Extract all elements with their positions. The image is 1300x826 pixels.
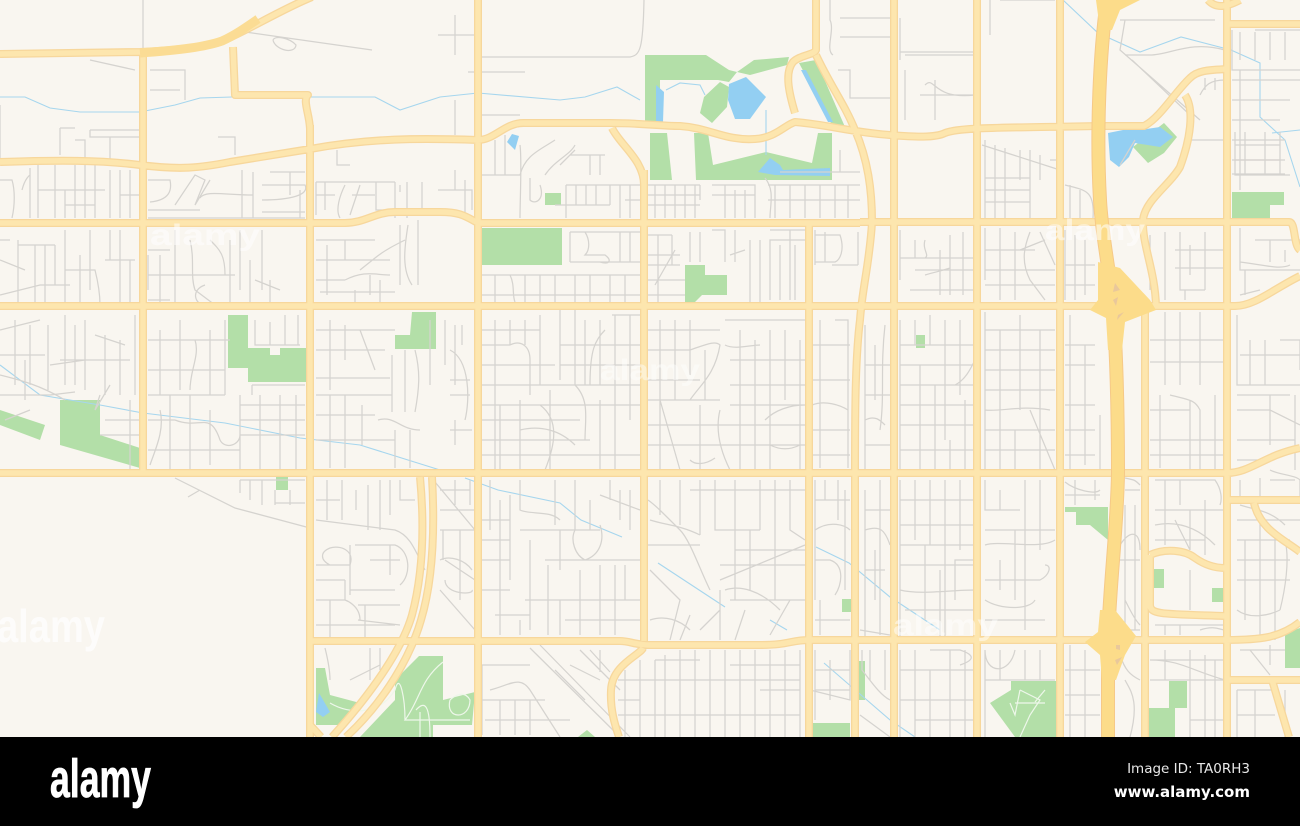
streets: north strip <box>0 50 1225 165</box>
park: central small <box>685 265 727 302</box>
freeway top fork <box>1096 0 1140 30</box>
streets: north edge <box>90 0 1300 190</box>
interchange: north <box>1090 262 1156 350</box>
lake: east <box>1108 127 1173 167</box>
lake: small <box>507 134 519 150</box>
streets: row C <box>0 315 140 470</box>
park: south golf <box>316 668 360 725</box>
watermark: centre: alamy <box>600 354 700 387</box>
park: north central rectangle <box>482 228 562 265</box>
lakes <box>316 70 1173 717</box>
streets: row D <box>175 478 310 528</box>
streets: row B <box>0 230 135 305</box>
park: west blocks <box>228 315 306 382</box>
interchange: south <box>1085 610 1136 680</box>
watermark: large west: alamy <box>0 600 105 652</box>
watermark: upper: alamy <box>150 219 260 252</box>
freeway fill <box>1098 0 1118 737</box>
streets: row E <box>325 648 380 680</box>
park: ring north <box>645 55 789 122</box>
park: east side <box>1232 192 1284 218</box>
streets: row A <box>0 165 140 218</box>
watermark: south: alamy <box>893 609 998 642</box>
lake: north <box>728 77 766 119</box>
watermark: east: alamy <box>1045 214 1145 247</box>
footer band <box>0 737 1300 826</box>
footer logo: alamy <box>50 749 151 809</box>
highway widening <box>140 19 258 53</box>
image id: Image ID: TA0RH3 <box>1127 761 1250 777</box>
freeway casing <box>1098 0 1118 737</box>
park: southwest strips <box>0 410 45 440</box>
interchanges <box>1085 0 1156 680</box>
website: www.alamy.com <box>1114 783 1250 801</box>
watermarks <box>0 214 1145 652</box>
park paths <box>330 662 1045 737</box>
